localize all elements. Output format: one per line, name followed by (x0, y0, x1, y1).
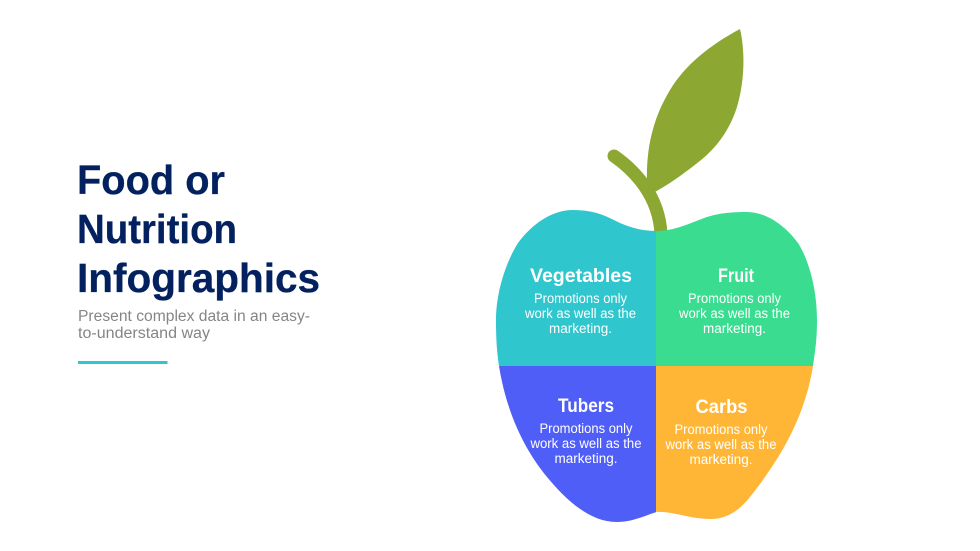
carbs segment (656, 366, 813, 519)
vegetables body: Promotions only (534, 291, 627, 306)
subtitle: to-understand way (78, 325, 210, 342)
tubers heading: Tubers (558, 396, 614, 417)
tubers segment (499, 366, 656, 522)
fruit body: work as well as the (678, 306, 790, 321)
title: Infographics (77, 255, 320, 301)
tubers body (530, 421, 642, 466)
fruit segment (656, 212, 817, 366)
title (77, 157, 320, 301)
vegetables body: work as well as the (524, 306, 636, 321)
vegetables body (524, 291, 636, 336)
tubers body: marketing. (554, 451, 618, 466)
panel: carbs (656, 366, 813, 519)
icon: apple stem (614, 156, 661, 234)
panel: fruit (656, 212, 817, 366)
fruit body: marketing. (703, 321, 766, 336)
fruit body: Promotions only (688, 291, 781, 306)
fruit body (678, 291, 790, 336)
carbs body: work as well as the (665, 437, 776, 452)
tubers body: Promotions only (540, 421, 633, 436)
fruit heading: Fruit (718, 266, 755, 287)
subtitle: Present complex data in an easy- (78, 308, 310, 325)
carbs body: Promotions only (674, 422, 768, 437)
panel: vegetables (496, 210, 656, 366)
carbs heading: Carbs (696, 397, 748, 418)
vegetables heading: Vegetables (530, 266, 632, 287)
vegetables body: marketing. (549, 321, 612, 336)
title: Nutrition (77, 206, 237, 252)
icon: leaf (647, 29, 743, 193)
carbs body (665, 422, 776, 467)
accent line (78, 361, 168, 364)
panel: tubers (499, 366, 656, 522)
carbs body: marketing. (690, 452, 752, 467)
subtitle (78, 308, 310, 342)
title: Food or (77, 157, 225, 203)
tubers body: work as well as the (530, 436, 642, 451)
vegetables segment (496, 210, 656, 366)
